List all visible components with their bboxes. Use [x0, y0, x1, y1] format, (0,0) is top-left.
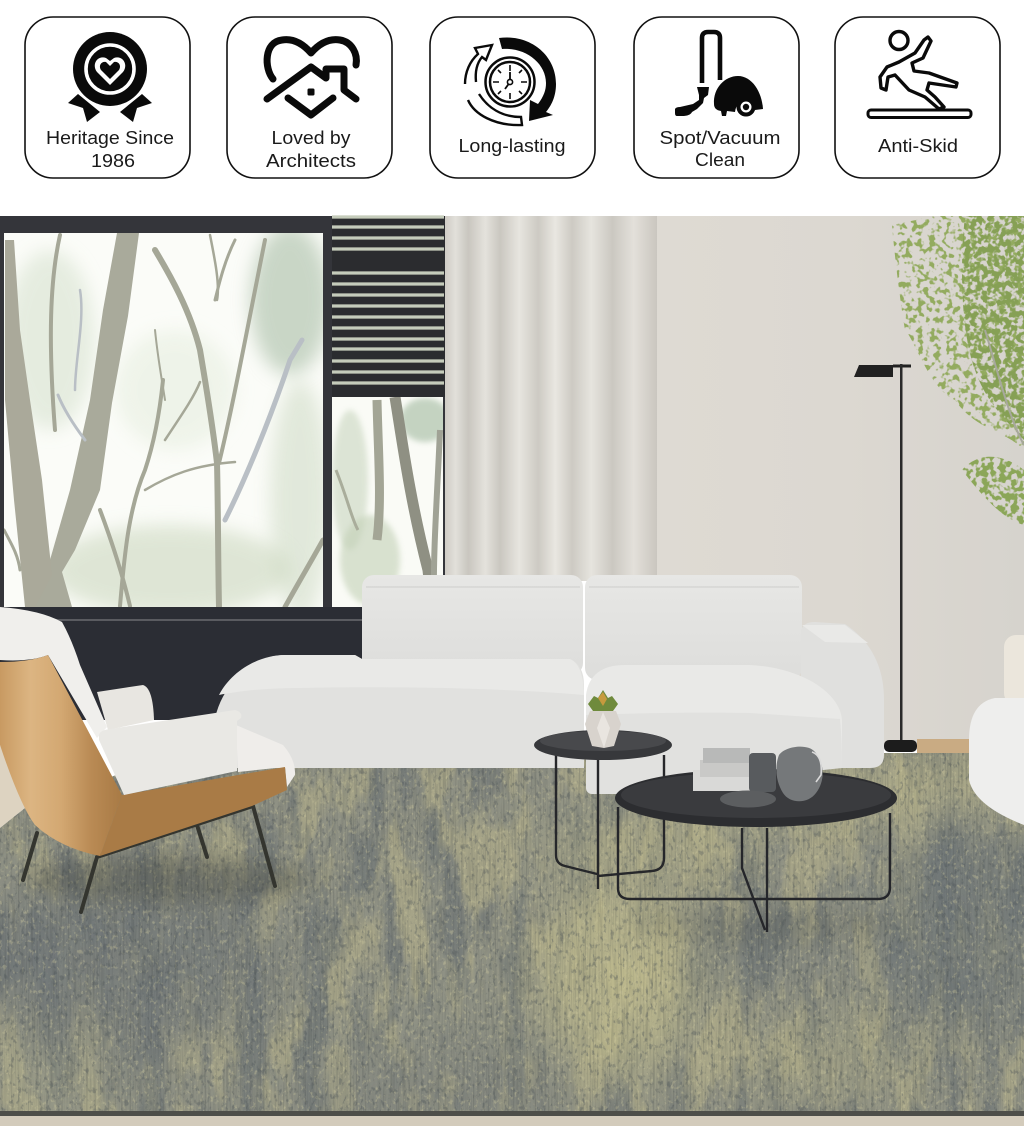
yellow patches	[535, 880, 705, 1080]
succulent	[588, 690, 618, 711]
sectional sofa	[213, 575, 884, 794]
feature card: Long-lasting	[430, 17, 595, 178]
speckle and weave texture	[0, 750, 1024, 1112]
white header background	[0, 0, 1024, 216]
wall	[656, 216, 1024, 746]
feature card: Heritage Since 1986	[25, 17, 190, 178]
cup	[749, 753, 776, 792]
tree on right	[892, 216, 1024, 525]
feature card: Spot/Vacuum Clean: Clean	[695, 149, 745, 170]
right back cushion	[585, 575, 802, 680]
icon: clock with circular arrows	[465, 38, 556, 125]
shadows on rug	[30, 856, 310, 904]
white pouf on right	[969, 635, 1024, 825]
wooden shell	[0, 655, 122, 856]
seat cushion	[236, 725, 295, 787]
main forked trunk	[27, 233, 139, 607]
floor	[0, 739, 1024, 1126]
vase	[585, 711, 621, 748]
icon: person slipping on floor	[868, 32, 971, 118]
feature card: Spot/Vacuum Clean	[634, 17, 799, 178]
icon: heart and house	[267, 40, 356, 115]
right chaise seat	[586, 665, 842, 794]
curtain	[445, 216, 657, 581]
icon: award ribbon with heart	[68, 32, 152, 122]
armchair	[0, 607, 295, 912]
inner back cushion	[97, 685, 154, 730]
label: Loved by	[272, 127, 351, 148]
label: Anti-Skid	[878, 135, 958, 156]
mottled mid-scale patches	[0, 750, 1024, 1112]
dish	[720, 790, 776, 808]
window with tree view	[0, 216, 450, 620]
round coffee table with books and teapot	[615, 747, 897, 932]
round side table with plant	[534, 690, 672, 889]
icon: vacuum cleaner	[675, 32, 763, 116]
chair legs	[23, 806, 275, 912]
right armrest	[801, 622, 884, 768]
left chaise seat	[213, 655, 584, 768]
books	[693, 748, 751, 791]
dark wall below window	[0, 607, 362, 720]
label: Spot/Vacuum	[660, 127, 780, 148]
louvre blinds	[332, 216, 445, 397]
left back cushion	[362, 575, 583, 675]
label: Long-lasting	[458, 135, 566, 156]
back cushion	[0, 607, 107, 738]
feature card: Loved by Architects	[227, 17, 392, 178]
armrest	[99, 710, 241, 795]
teapot	[776, 747, 823, 801]
feature card: Loved by Architects: Architects	[266, 150, 356, 171]
right pane trees	[332, 397, 450, 607]
grey patches	[0, 870, 280, 1050]
floor lamp	[854, 364, 917, 752]
label: Heritage Since	[46, 127, 174, 148]
left pane trees	[4, 225, 330, 620]
area rug	[0, 750, 1024, 1120]
feature card: Anti-Skid	[835, 17, 1000, 178]
feature card: Heritage Since 1986: 1986	[91, 150, 135, 171]
